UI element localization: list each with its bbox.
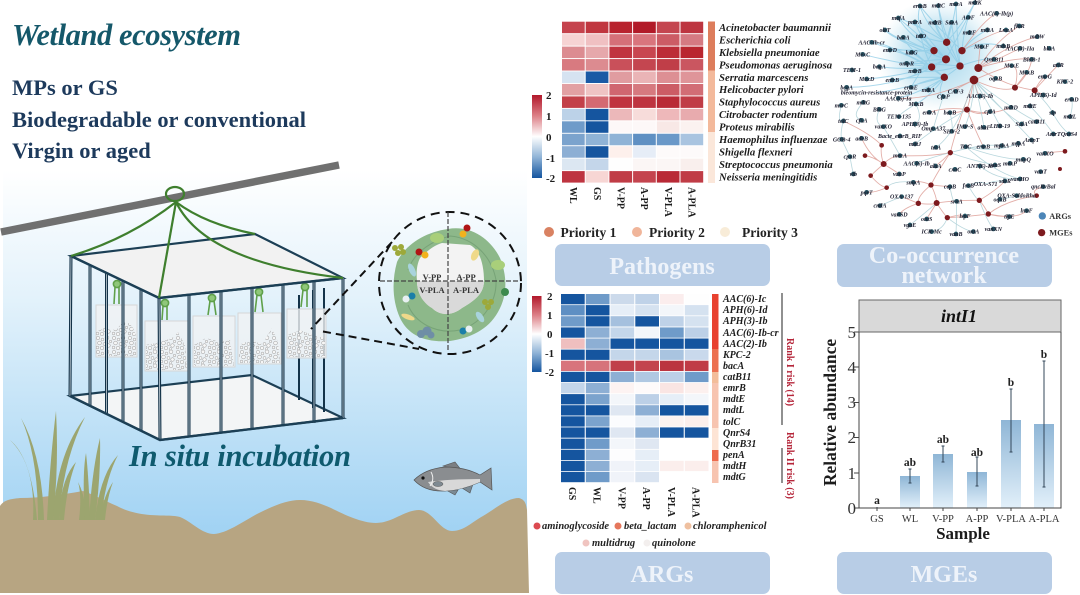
- sample labels: A-PLA: [690, 487, 700, 518]
- network node labels: msrA: [949, 2, 963, 8]
- icon: fish: [414, 462, 492, 495]
- network node labels: cxaC: [949, 167, 962, 173]
- network node labels: MexB: [1018, 70, 1034, 76]
- network node labels: MexB: [908, 102, 923, 108]
- network node labels: qncBvBal: [1031, 185, 1056, 191]
- network node labels: fosB: [963, 184, 974, 190]
- x tick labels: GS: [870, 514, 884, 525]
- pathogen names: Streptococcus pneumonia: [719, 159, 833, 171]
- ARG class legend: multidrug: [592, 538, 635, 549]
- vertical bars: [70, 256, 343, 440]
- ARG names: QnrS4: [723, 428, 750, 439]
- error bars: [877, 361, 1046, 508]
- quadrant labels: A-PP: [456, 272, 476, 282]
- network node labels: ermB: [976, 145, 990, 151]
- text: study factors: Virgin or aged: [12, 138, 151, 163]
- network node labels: adeB: [855, 136, 868, 142]
- network node labels: vanP: [893, 172, 906, 178]
- network node labels: emrG: [1038, 75, 1053, 81]
- ARG names: KPC-2: [722, 350, 751, 361]
- network node labels: mdtG: [857, 100, 871, 106]
- network node labels: mdtB: [928, 21, 942, 27]
- text: study factors: [12, 75, 306, 163]
- network node labels: KPC-2: [1056, 80, 1073, 86]
- ARG names: catB11: [723, 372, 751, 383]
- network node labels: bleomycin-resistance-protein: [841, 91, 913, 97]
- network node labels: CAT-3: [948, 89, 964, 95]
- quadrant labels: A-PLA: [453, 285, 480, 295]
- ARG class legend: [534, 521, 767, 549]
- attached particles: [392, 224, 509, 338]
- colour bar labels: -1: [546, 153, 555, 165]
- network node labels: floR: [1014, 24, 1025, 30]
- teal edges: [839, 80, 1072, 234]
- significance letters: ab: [971, 447, 983, 459]
- panel: MGEs bar chart: [820, 300, 1061, 543]
- panel: co-occurrence network: [833, 0, 1079, 238]
- colour bar labels: [546, 90, 556, 185]
- colour bar labels: 2: [547, 291, 553, 303]
- network node labels: mecA: [893, 154, 907, 160]
- risk rank brackets: [781, 293, 783, 483]
- ARG names: mdtH: [723, 461, 748, 472]
- network node labels: MexD: [858, 77, 875, 83]
- pathogen names: Serratia marcescens: [719, 72, 808, 84]
- sample labels: [567, 187, 696, 218]
- cage floor: [70, 375, 343, 440]
- network node labels: QnrS4: [1061, 132, 1077, 138]
- heatmap cells: [562, 22, 703, 183]
- network node labels: ermD: [1065, 97, 1079, 103]
- ARG class legend: aminoglycoside: [542, 521, 609, 532]
- network node labels: oqxB: [989, 76, 1002, 82]
- ARG names: AAC(6)-Ib-cr: [722, 328, 779, 339]
- priority strip: [708, 22, 715, 183]
- label: pathogens: Pathogens: [609, 254, 715, 280]
- back bars: [283, 288, 324, 412]
- x tick labels: A-PLA: [1029, 514, 1060, 525]
- colour bar labels: -2: [546, 173, 556, 185]
- network node labels: Bacte_emrB_RIF: [877, 134, 922, 140]
- panel: microplastic zoom inset: [379, 212, 521, 354]
- network node labels: mdtA: [922, 88, 935, 94]
- network node labels: mdtF: [963, 31, 976, 37]
- panel: ARGs heatmap: [532, 291, 795, 549]
- colour bar labels: 1: [546, 111, 552, 123]
- network node labels: mupQ: [1016, 157, 1032, 163]
- green ropes: [71, 187, 343, 298]
- network node labels: oleT: [880, 28, 891, 34]
- dashed magnifier circle: [379, 212, 521, 354]
- network legend: ARGs: [1049, 212, 1072, 221]
- label: MGEs: MGEs: [911, 562, 977, 588]
- network node labels: mdtD: [1004, 105, 1018, 111]
- zoom leader lines: [311, 242, 419, 349]
- ARG names: bacA: [723, 361, 744, 372]
- pathogen names: Klebsiella pneumoniae: [718, 47, 820, 59]
- network node labels: pmrA: [907, 20, 922, 26]
- network node labels: mdtK: [968, 1, 983, 7]
- sample labels: GS: [591, 187, 602, 201]
- y tick labels: 4: [848, 358, 856, 377]
- network node labels: GOB-4: [833, 137, 850, 143]
- network node labels: mdsB: [996, 44, 1010, 50]
- sample labels: A-PP: [640, 487, 651, 510]
- network node labels: emrA: [923, 110, 936, 116]
- network node labels: SulA: [1015, 122, 1028, 128]
- blue edges: [847, 3, 1003, 104]
- ARG class legend: beta_lactam: [624, 521, 676, 532]
- top panel: [71, 234, 343, 298]
- network node labels: blaA: [1043, 46, 1055, 52]
- network node labels: mdtA: [981, 28, 994, 34]
- network node labels: vanSD: [891, 212, 908, 218]
- network node labels: AmpT: [1023, 138, 1040, 144]
- network node labels: ermE: [904, 85, 918, 91]
- sample labels: V-PLA: [662, 187, 673, 218]
- network node labels: vanXO: [875, 125, 893, 131]
- network node labels: cpxR: [844, 155, 856, 161]
- network node labels: OXA-137: [890, 195, 914, 201]
- network node labels: CfxP: [937, 95, 950, 101]
- y tick labels: 1: [848, 464, 856, 483]
- pathogen names: Shigella flexneri: [719, 146, 792, 158]
- network node labels: mfpA: [1011, 141, 1025, 147]
- network node labels: sdeR: [998, 179, 1011, 185]
- y axis title: Relative abundance: [820, 339, 840, 486]
- chart title strip: [859, 300, 1061, 332]
- network node labels: SaeA: [945, 20, 958, 26]
- network node labels: ermB: [913, 4, 927, 10]
- network node labels: vanHO: [1011, 177, 1030, 183]
- x tick labels: [870, 514, 1060, 525]
- priority legend: [544, 225, 798, 240]
- network node labels: IMP-S: [956, 125, 974, 131]
- caption: in situ incubation: In situ incubation: [128, 439, 351, 473]
- risk rank labels: [784, 338, 795, 499]
- network node labels: srnA: [950, 199, 963, 205]
- network node labels: bagA: [873, 65, 886, 71]
- network node labels: vanXN: [985, 227, 1003, 233]
- network legend: [1038, 212, 1073, 238]
- icon: grass: [10, 411, 118, 520]
- label: pathogens: [555, 244, 770, 286]
- priority legend: Priority 1: [560, 225, 617, 240]
- bars: [900, 420, 1054, 508]
- significance letters: ab: [904, 457, 916, 469]
- network node labels: SHV-2: [943, 129, 960, 135]
- panel: incubation cage: [70, 187, 343, 440]
- colour bar: [532, 296, 542, 372]
- ARG names: QnrB31: [723, 439, 756, 450]
- pathogen names: Acinetobacter baumannii: [718, 22, 831, 34]
- pathogen names: Helicobacter pylori: [718, 84, 804, 96]
- network node labels: AmrT: [1045, 132, 1061, 138]
- network node labels: tlpE: [1004, 215, 1014, 221]
- inner plastic surface: [417, 243, 484, 314]
- ARG class legend: chloramphenicol: [693, 521, 767, 532]
- network node labels: mphA: [994, 144, 1009, 150]
- axes: [854, 332, 1061, 511]
- network node labels: mdtJ: [909, 142, 922, 148]
- network node labels: msrC: [835, 103, 849, 109]
- x tick labels: V-PLA: [996, 514, 1026, 525]
- network node labels: QnrB11: [984, 57, 1004, 63]
- network node labels: LHR-19: [989, 124, 1010, 130]
- network node labels: [833, 1, 1079, 238]
- network node labels: tetO: [916, 34, 927, 40]
- dense edge haze: [877, 0, 1003, 112]
- network node labels: oqxB: [993, 197, 1006, 203]
- network node labels: alaA: [930, 164, 941, 170]
- chart title strip: intI1: [941, 306, 977, 326]
- sample labels: WL: [590, 487, 602, 504]
- network node labels: bacB: [944, 111, 956, 117]
- label: co-occurrence network: [837, 243, 1052, 289]
- network node labels: msrB: [908, 69, 922, 75]
- y tick labels: 0: [848, 499, 856, 518]
- sample labels: WL: [567, 187, 578, 204]
- sediment: [0, 491, 529, 593]
- network node labels: AAC(3)-IIa: [1005, 45, 1034, 52]
- sample labels: GS: [566, 487, 577, 501]
- ARG names: mdtL: [723, 405, 745, 416]
- network node labels: bcgA: [840, 85, 853, 91]
- significance letters: a: [874, 495, 880, 507]
- network node labels: tetA: [931, 145, 941, 151]
- resistance class strip: [712, 294, 718, 483]
- ARG names: [722, 294, 779, 483]
- pathogen names: Pseudomonas aeruginosa: [719, 59, 833, 71]
- network node labels: OXA-SoldoRha: [997, 194, 1036, 200]
- ARG names: AAC(2)-Ib: [722, 339, 767, 350]
- pathogen names: Citrobacter rodentium: [719, 109, 817, 121]
- heatmap cells: [561, 294, 708, 482]
- sample labels: A-PLA: [686, 187, 696, 218]
- network node labels: AAC-Ib-cr: [858, 40, 885, 46]
- network node labels: emrB: [886, 78, 899, 84]
- x tick labels: V-PP: [932, 514, 954, 525]
- network node labels: BlaB-1: [1022, 57, 1040, 63]
- water background: [3, 170, 527, 535]
- network node labels: cplA: [984, 110, 996, 116]
- icon: suspension pole: [1, 165, 339, 232]
- label: co-occurrence network: Co-occurrence: [869, 243, 1019, 269]
- sample labels: [566, 487, 700, 518]
- sample labels: V-PP: [616, 487, 626, 509]
- network node labels: ompR: [899, 61, 914, 67]
- colour bar: [532, 95, 542, 178]
- colour bar labels: [545, 291, 555, 379]
- colour bar labels: -2: [545, 367, 555, 379]
- sample bags: [96, 305, 326, 371]
- network node labels: smpA: [905, 180, 920, 186]
- network node labels: AcrF: [961, 15, 975, 21]
- biofilm ring: [394, 228, 505, 341]
- network node labels: catB11: [1028, 120, 1045, 126]
- ARG class legend: quinolone: [652, 538, 696, 549]
- panel: wetland scene: [0, 18, 529, 593]
- network node labels: mexP: [1003, 161, 1017, 167]
- quadrant labels: V-PP: [423, 272, 441, 282]
- network node labels: cfxA: [856, 118, 867, 124]
- ARG names: APH(6)-Id: [722, 305, 768, 316]
- network node labels: MexF: [973, 45, 989, 51]
- panel: pathogens heatmap: [532, 22, 833, 240]
- sample labels: V-PP: [614, 187, 626, 209]
- network node labels: mefA: [892, 16, 905, 22]
- colour bar labels: -1: [545, 348, 554, 360]
- network node labels: AAC(6)-Ib: [966, 93, 993, 100]
- pathogen names: Neisseria meningitidis: [718, 171, 817, 183]
- network node labels: lnuF: [1020, 209, 1033, 215]
- quadrant labels: V-PLA: [419, 285, 446, 295]
- x tick labels: A-PP: [966, 514, 989, 525]
- ARG names: tolC: [723, 417, 741, 428]
- significance letters: b: [1008, 377, 1014, 389]
- network node labels: ICR-Mc: [921, 230, 942, 236]
- network node labels: sip: [1048, 111, 1056, 117]
- pathogen names: Haemophilus influenzae: [718, 134, 828, 146]
- network node labels: pqrT: [860, 190, 873, 196]
- significance letters: [874, 349, 1047, 507]
- network node labels: APH(3)-Ib: [901, 121, 928, 128]
- green clips: [113, 280, 309, 320]
- label: ARGs: ARGs: [631, 562, 693, 588]
- cage frame edges: [70, 256, 343, 440]
- network node labels: vgaE: [904, 223, 916, 229]
- network node labels: vanS: [989, 163, 1002, 169]
- colour bar labels: 2: [546, 90, 552, 102]
- network node labels: TEM-135: [887, 115, 911, 121]
- network node labels: lspF: [959, 214, 970, 220]
- text: study factors: Biodegradable or conventional: [12, 107, 306, 132]
- risk rank labels: Rank II risk (3): [784, 432, 795, 499]
- network node labels: katG: [906, 50, 918, 56]
- ARG nodes: [839, 0, 1074, 236]
- network node labels: BlaG: [872, 107, 886, 113]
- network node labels: emrD: [883, 48, 898, 54]
- pathogen names: Proteus mirabilis: [719, 122, 795, 134]
- significance letters: ab: [937, 434, 949, 446]
- ARG names: emrB: [723, 383, 746, 394]
- priority legend: Priority 3: [742, 225, 798, 240]
- quadrant labels: [419, 272, 480, 295]
- significance letters: b: [1041, 349, 1047, 361]
- red edges: [843, 13, 1065, 219]
- y tick labels: 2: [848, 428, 856, 447]
- network node labels: tolC: [838, 119, 849, 125]
- network legend: MGEs: [1049, 229, 1073, 238]
- label: ARGs: [555, 552, 770, 594]
- network node labels: LnuA: [998, 28, 1013, 34]
- network node labels: vanB: [950, 232, 962, 238]
- network node labels: arlR: [1053, 63, 1064, 69]
- ARG names: mdtG: [723, 472, 747, 483]
- network node labels: AAC(6)-Ib(p): [979, 10, 1013, 17]
- lower plastic surface: [417, 281, 484, 314]
- pathogen names: [718, 22, 833, 183]
- ARG names: penA: [722, 450, 745, 461]
- network node labels: TEM-1: [843, 68, 861, 74]
- network node labels: mdtW: [1030, 35, 1045, 41]
- network node labels: cmlA: [874, 204, 886, 210]
- network node labels: mdtC: [932, 4, 946, 10]
- risk rank labels: Rank I risk (14): [784, 338, 795, 406]
- priority legend: Priority 2: [649, 225, 705, 240]
- network node labels: cepB: [944, 185, 956, 191]
- network node labels: bacA: [897, 35, 910, 41]
- colour bar labels: 0: [547, 329, 553, 341]
- network node labels: TetC: [960, 145, 972, 151]
- network node labels: AAC(6)-Ia: [884, 95, 911, 102]
- sample labels: A-PP: [638, 187, 649, 210]
- network node labels: abaF: [978, 125, 990, 131]
- network node labels: OXA-S71: [974, 182, 997, 188]
- sample labels: V-PLA: [665, 487, 676, 518]
- MGE hub nodes: [863, 39, 1067, 220]
- dashed quadrant cross: [380, 212, 520, 351]
- y tick labels: 3: [848, 393, 856, 412]
- network node labels: ANT(6)-Ib: [966, 163, 993, 170]
- y tick labels: 5: [848, 323, 856, 342]
- label: MGEs: [837, 552, 1052, 594]
- pathogen names: Escherichia coli: [718, 34, 791, 46]
- network node labels: MexC: [854, 52, 871, 58]
- network node labels: mdtE: [1023, 104, 1037, 110]
- label: co-occurrence network: network: [901, 263, 987, 289]
- text: study factors: MPs or GS: [12, 75, 118, 100]
- ARG names: AAC(6)-Ic: [722, 294, 767, 305]
- network node labels: Omp-A37: [921, 127, 946, 133]
- network node labels: vtb: [850, 172, 857, 178]
- inner ring line: [408, 236, 496, 331]
- x axis title: Sample: [936, 524, 990, 543]
- colour bar labels: 1: [547, 310, 552, 322]
- pathogen names: Staphylococcus aureus: [719, 97, 820, 109]
- x tick labels: WL: [902, 514, 918, 525]
- heading: wetland ecosystem: Wetland ecosystem: [12, 18, 241, 52]
- network node labels: vanT: [1034, 170, 1047, 176]
- y tick labels: [848, 323, 856, 518]
- network node labels: MexE: [1003, 64, 1019, 70]
- network node labels: mdtL: [1063, 115, 1077, 121]
- network node labels: AAC(6)-Ib: [903, 160, 930, 167]
- network node labels: APH(6)-Id: [1029, 92, 1058, 99]
- ARG names: APH(3)-Ib: [722, 316, 767, 327]
- network node labels: ontS: [921, 217, 933, 223]
- ARG names: mdtE: [723, 394, 746, 405]
- colour bar labels: 0: [546, 132, 552, 144]
- network node labels: vanXO: [1036, 151, 1054, 157]
- network node labels: ontA: [967, 230, 979, 236]
